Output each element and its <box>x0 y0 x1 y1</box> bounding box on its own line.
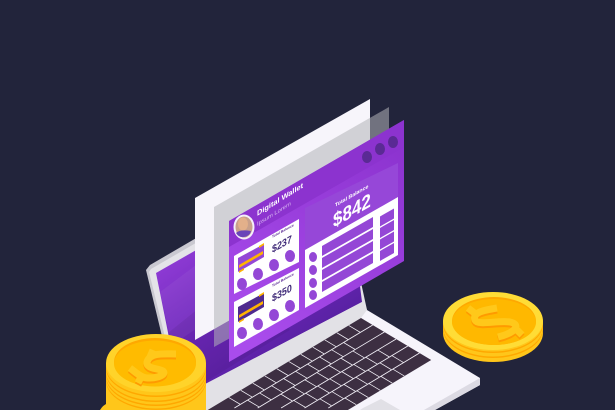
credit card 1 <box>238 243 264 273</box>
amount: $350: $350 <box>272 283 292 305</box>
label: Total Balance small: Total Balance <box>272 272 294 288</box>
window control dots <box>362 136 398 163</box>
card panel 1 <box>234 219 299 294</box>
laptop base <box>190 310 480 410</box>
window header <box>229 120 404 247</box>
grey translucent sheet <box>214 107 389 347</box>
amount: $237: $237 <box>272 234 292 256</box>
label: Total Balance small: Total Balance <box>272 223 294 239</box>
credit card 2 <box>238 292 264 323</box>
wallet app window <box>229 120 404 362</box>
label: Total Balance: Total Balance <box>335 184 368 209</box>
white paper sheet <box>195 99 370 340</box>
card panel 2 <box>234 268 299 347</box>
table row bars <box>322 217 373 292</box>
laptop lid <box>146 160 367 402</box>
amount: $842: $842 <box>333 189 371 233</box>
keyboard <box>208 318 431 410</box>
card 1 dots <box>237 250 295 290</box>
laptop <box>146 160 480 410</box>
window body <box>229 120 404 362</box>
table value cells <box>380 208 394 261</box>
right coin stack <box>443 292 543 362</box>
balance panel background <box>305 163 398 250</box>
subheading: Ipsum Lorem: Ipsum Lorem <box>257 200 291 228</box>
balance table panel <box>305 197 398 308</box>
table row dots <box>309 252 317 300</box>
heading: Digital Wallet: Digital Wallet <box>257 181 303 218</box>
dollar icon <box>130 350 176 385</box>
card 2 dots <box>237 300 295 339</box>
touchpad <box>360 399 400 410</box>
hinge deck band <box>186 302 367 410</box>
avatar <box>234 214 254 240</box>
left coin stack <box>100 334 206 410</box>
dollar icon <box>468 308 522 339</box>
